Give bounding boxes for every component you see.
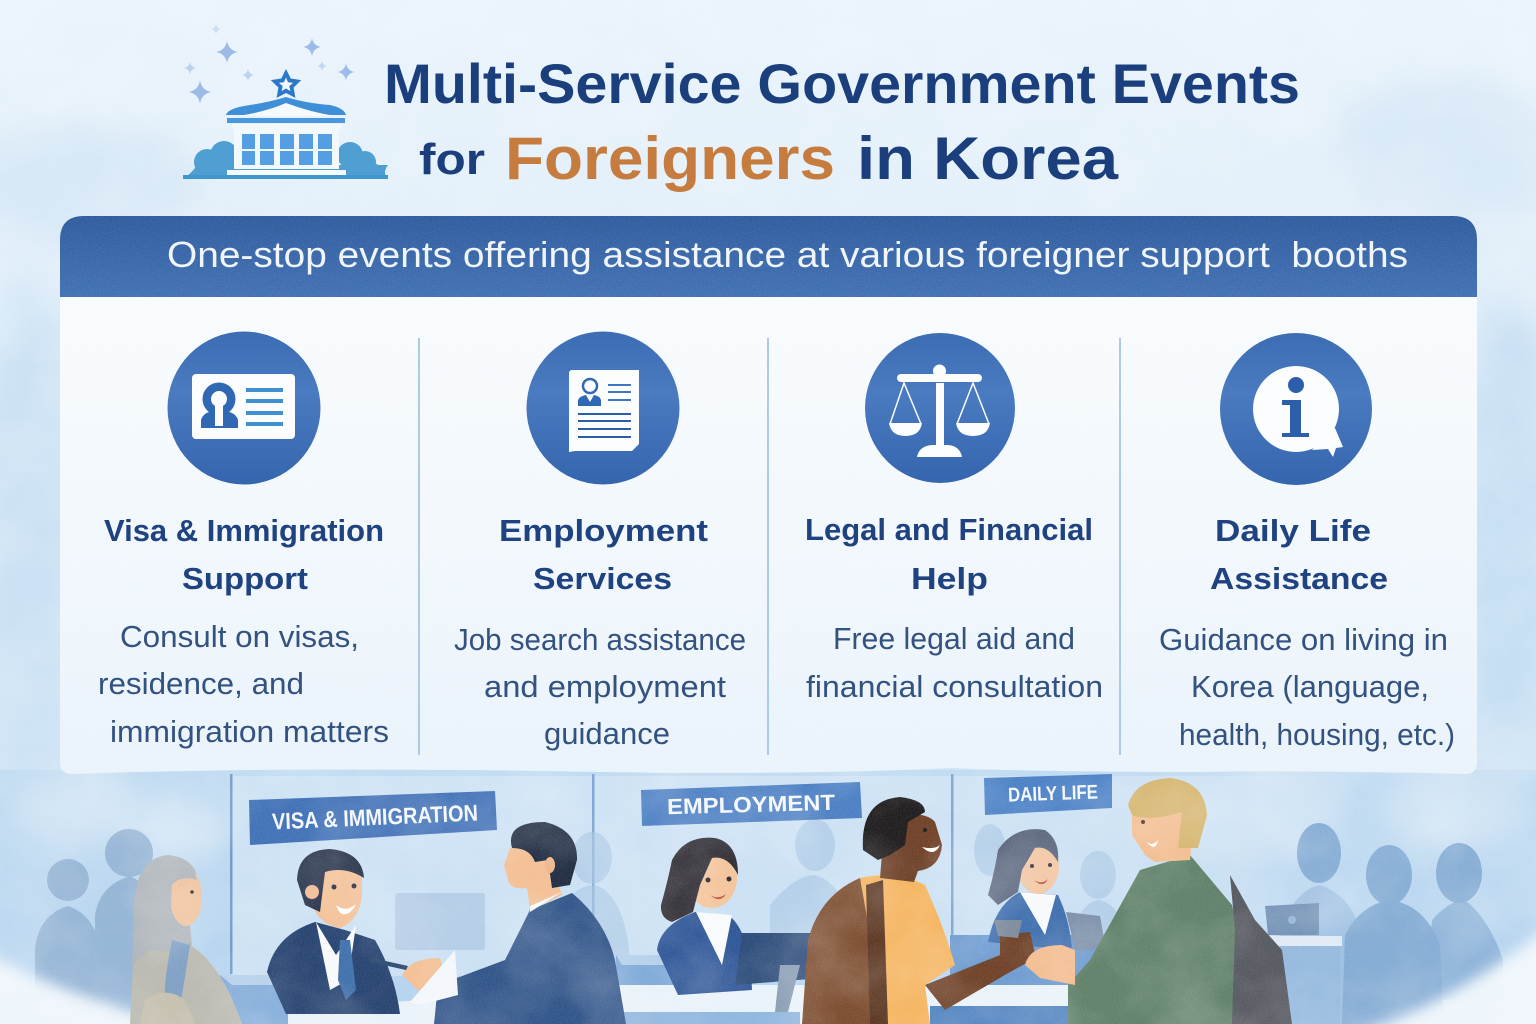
description: [806, 621, 1103, 704]
main panel: [60, 216, 1477, 774]
description: [1159, 622, 1455, 752]
icon: info speech bubble: [1220, 333, 1372, 485]
background laptop right: [1265, 903, 1319, 935]
column: visa and immigration support: [98, 332, 389, 749]
icon: balance scales: [865, 333, 1015, 483]
column: daily life assistance: [1159, 333, 1455, 752]
description: Guidance on living in: [1159, 622, 1448, 657]
booth glass panels and posts: [230, 774, 1313, 976]
title: Multi-Service Government Events: [384, 52, 1300, 115]
heading: Services: [533, 561, 672, 596]
description: residence, and: [98, 666, 304, 701]
description: [98, 619, 389, 749]
column: employment services: [454, 332, 746, 751]
person: man with yellow shirt and brown bag: [802, 797, 1036, 1024]
desk far right: [1280, 942, 1340, 1024]
heading: Assistance: [1210, 561, 1388, 596]
phone in hand: [994, 920, 1022, 938]
description: financial consultation: [806, 669, 1103, 704]
heading: [1210, 513, 1388, 596]
heading: Support: [182, 561, 308, 596]
sign: daily life: DAILY LIFE: [1008, 781, 1098, 807]
sign: daily life: [984, 774, 1112, 815]
counters: [220, 935, 1120, 1024]
person: blond man with green jacket: [1025, 778, 1246, 1024]
crowd haze: [10, 765, 1520, 860]
column: legal and financial help: [805, 333, 1103, 704]
person: agent, employment booth: [657, 838, 752, 995]
heading: Help: [911, 561, 988, 596]
heading: Employment: [499, 513, 708, 548]
laptop, employment booth: [735, 933, 822, 1012]
title logo: government building: [183, 24, 388, 179]
person: customer in suit: [370, 822, 626, 1024]
person: woman in hijab: [130, 855, 242, 1024]
sign: visa & immigration: VISA & IMMIGRATION: [271, 800, 478, 834]
title: [384, 52, 1300, 192]
description: Job search assistance: [454, 622, 746, 657]
description: immigration matters: [110, 714, 389, 749]
faint silhouettes inside booths: [560, 819, 1130, 960]
description: guidance: [544, 716, 670, 751]
person: agent, daily life booth: [988, 829, 1072, 950]
column dividers: [418, 338, 1121, 755]
title: Foreigners: [505, 125, 835, 192]
heading: Legal and Financial: [805, 512, 1093, 547]
roof: [226, 97, 346, 115]
white mist, bottom corners: [0, 920, 1536, 1024]
description: Korea (language,: [1191, 669, 1429, 704]
person: agent in suit, visa booth: [267, 849, 400, 1014]
sparkles: [184, 24, 354, 104]
description: and employment: [484, 669, 726, 704]
left background crowd silhouettes: [35, 829, 160, 1024]
scene backdrop: [0, 770, 1536, 1024]
title: for: [419, 135, 485, 184]
facade: [234, 129, 339, 169]
illustration: service booth scene: [0, 765, 1536, 1024]
description: Consult on visas,: [120, 619, 359, 654]
right background crowd silhouettes: [1270, 823, 1503, 1024]
panel header bar: [60, 216, 1477, 297]
heading: [805, 512, 1093, 596]
faint monitor, visa booth: [395, 893, 485, 950]
star: [271, 69, 301, 98]
sign: employment: EMPLOYMENT: [667, 790, 836, 819]
heading: Visa & Immigration: [104, 513, 384, 548]
trees: [183, 141, 388, 179]
icon: resume document: [526, 332, 680, 484]
heading: Daily Life: [1215, 513, 1371, 548]
laptop, daily life booth: [1066, 912, 1106, 950]
description: health, housing, etc.): [1179, 717, 1455, 752]
title: in Korea: [857, 125, 1119, 192]
sign: employment: [641, 782, 862, 826]
panel header bar: One-stop events offering assistance at various foreigner support booths: [167, 234, 1408, 275]
description: Free legal aid and: [833, 621, 1075, 656]
heading: [499, 513, 708, 596]
heading: [104, 513, 384, 596]
backpack on blond man: [1230, 875, 1292, 1024]
sign: visa & immigration: [249, 791, 497, 845]
description: [454, 622, 746, 751]
icon: id card: [168, 332, 320, 484]
